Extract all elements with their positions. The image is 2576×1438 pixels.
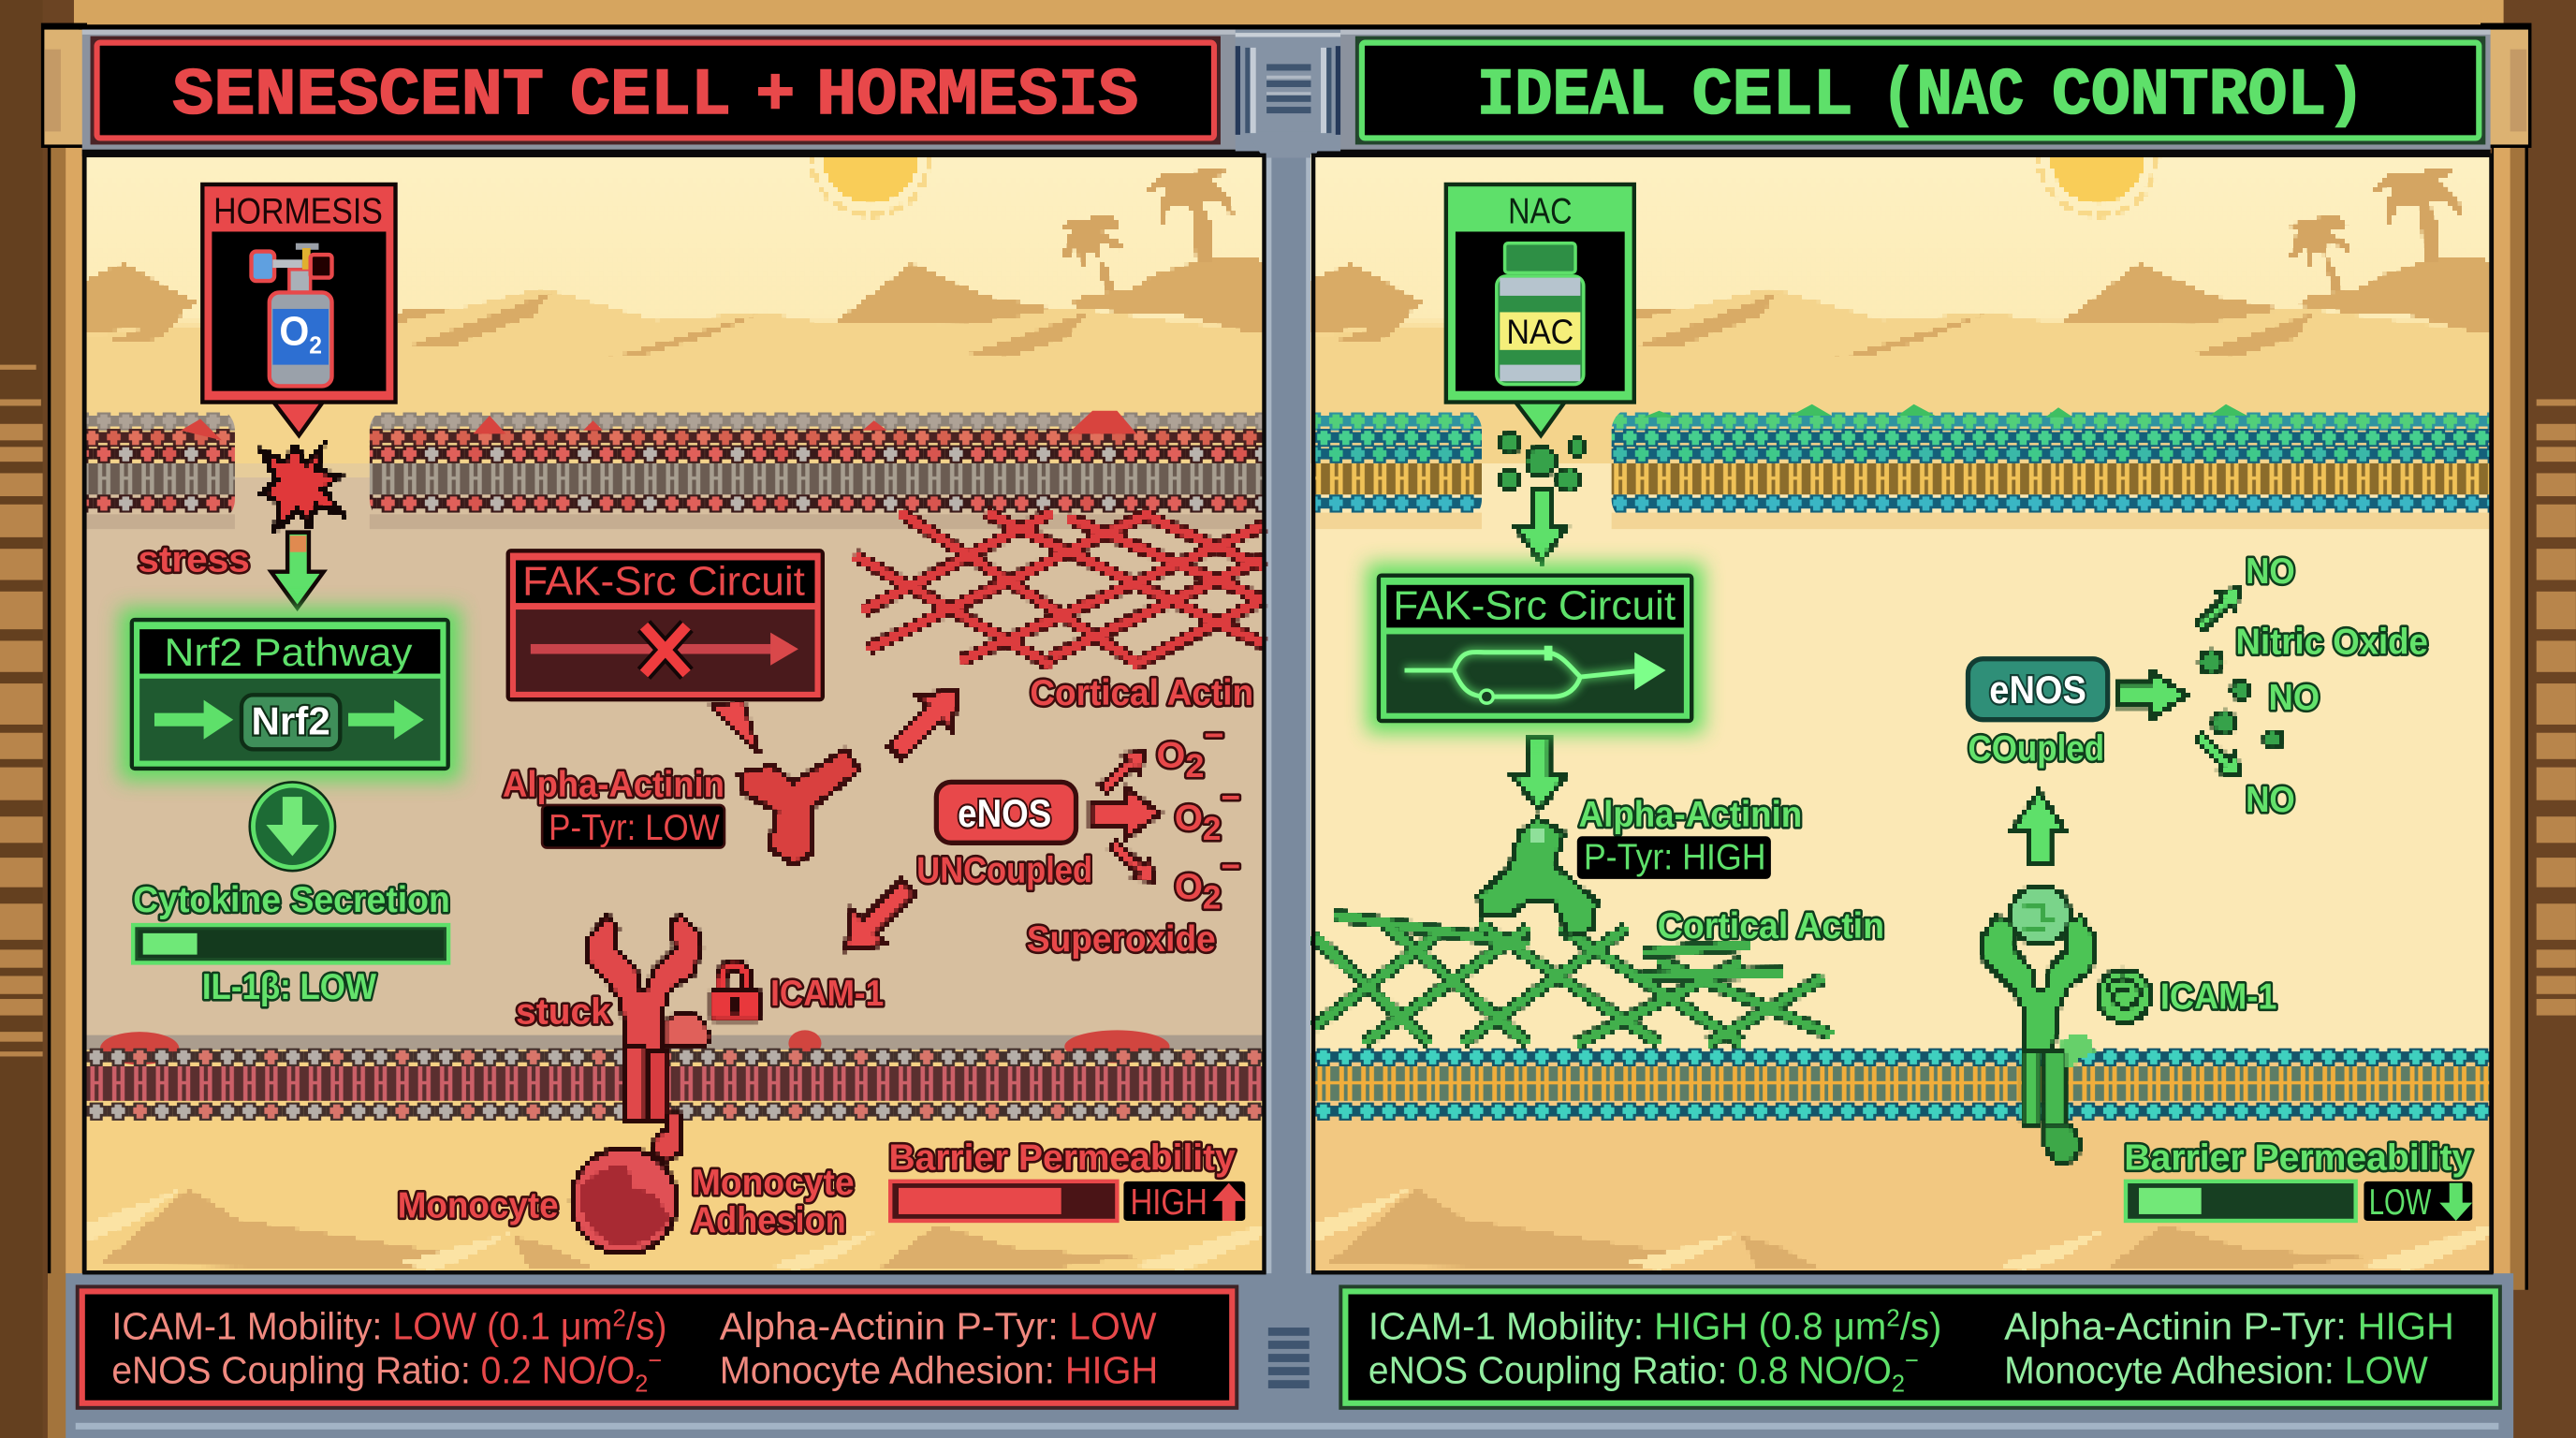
arrow: superoxide down	[1104, 834, 1164, 891]
arrow: eNOS to ICAM	[828, 870, 926, 967]
badge: high: HIGH	[1130, 1182, 1208, 1223]
stats panel: senescent	[76, 1284, 1238, 1410]
callout: hormesis oxygen	[200, 183, 398, 435]
lower vent	[1268, 1328, 1310, 1388]
arrow: eNOS to superoxide	[1090, 788, 1160, 838]
arrow: NO up	[2190, 580, 2248, 637]
panel: FAK-Src circuit broken	[506, 549, 825, 701]
stats panel: ideal: ICAM-1 Mobility: HIGH (0.8 μm	[1368, 1304, 1888, 1347]
label: NO middle: NO	[2269, 678, 2320, 718]
arrow: coupled signal up	[2012, 792, 2065, 864]
stats panel: senescent: 2	[612, 1303, 626, 1331]
superoxide O2- bottom: 2	[1203, 880, 1221, 917]
label: cortical actin: Cortical Actin	[1658, 906, 1884, 946]
panel outlines	[84, 155, 2491, 1272]
label: monocyte adhesion: Adhesion	[692, 1200, 846, 1240]
label: alpha-actinin: Alpha-Actinin	[1579, 795, 1802, 835]
bar: cytokine level	[133, 925, 448, 962]
upper membrane: ideal	[1281, 404, 2539, 529]
icon: padlock	[711, 965, 759, 1020]
ICAM-1 receptor, stuck	[587, 916, 711, 1162]
arrow: FAK-Src to alpha-actinin	[1513, 738, 1566, 810]
arrow: NAC to FAK-Src	[1515, 490, 1567, 562]
stress arrow	[271, 533, 324, 608]
superoxide O2- bottom: O	[1175, 867, 1203, 907]
upper vent	[1266, 64, 1310, 113]
lower membrane: senescent	[85, 1030, 1264, 1121]
icon: cytokine secretion down	[250, 782, 335, 871]
eNOS uncoupled pill	[936, 782, 1076, 843]
monocyte cell	[572, 1149, 677, 1254]
icon: NAC bottle	[1497, 243, 1584, 385]
title bar: senescent cell	[91, 37, 1221, 144]
label: nitric oxide: Nitric Oxide	[2236, 622, 2428, 662]
label: cortical actin: Cortical Actin	[1030, 673, 1253, 713]
ideal membranes	[1281, 404, 2539, 1121]
eNOS uncoupled pill: eNOS	[958, 791, 1051, 835]
icon: mobility spiral	[2098, 969, 2150, 1022]
label: ICAM-1: ICAM-1	[2160, 977, 2276, 1018]
label: NO top: NO	[2246, 551, 2295, 592]
label: barrier permeability: Barrier Permeability	[2124, 1138, 2473, 1179]
nitric oxide particles	[2200, 651, 2283, 748]
icon: NAC bottle: NAC	[1506, 313, 1573, 351]
superoxide O2- middle: 2	[1203, 811, 1221, 847]
title bar: ideal cell: IDEAL	[1477, 60, 1666, 134]
icon: oxygen tank	[252, 243, 332, 386]
panel: Nrf2 pathway: Nrf2	[252, 698, 330, 742]
eNOS coupled pill	[1968, 659, 2108, 720]
callout: NAC	[1444, 183, 1636, 435]
senescent membranes	[50, 411, 1308, 1121]
callout: NAC: NAC	[1508, 192, 1573, 232]
label: stress: stress	[138, 540, 250, 580]
icon: stress burst	[263, 447, 342, 529]
superoxide O2- top: −	[1204, 717, 1223, 754]
alpha-actinin protein	[1479, 818, 1597, 936]
label: uncoupled: UNCoupled	[916, 850, 1092, 890]
superoxide O2- middle: −	[1221, 779, 1240, 815]
stats panel: senescent: Monocyte Adhesion: HIGH	[720, 1349, 1158, 1392]
label: NO bottom: NO	[2246, 780, 2295, 820]
panel: FAK-Src circuit active: FAK-Src Circuit	[1393, 583, 1676, 629]
title bar: ideal cell: (NAC	[1881, 60, 2024, 134]
label: barrier permeability: Barrier Permeability	[888, 1138, 1236, 1179]
ICAM-1 receptor, mobile	[1983, 886, 2096, 1164]
label: IL-1 beta: IL-1β: LOW	[202, 967, 376, 1007]
label: ICAM-1: ICAM-1	[770, 974, 884, 1014]
upper membrane: senescent	[50, 411, 1308, 529]
panel: senescent cell artwork	[263, 447, 1264, 1254]
arrow: NO down	[2190, 727, 2248, 785]
badge: low: LOW	[2369, 1182, 2432, 1223]
cortical actin network	[855, 513, 1264, 666]
superoxide O2- top: 2	[1185, 748, 1204, 785]
cortical actin network	[1314, 916, 1832, 1043]
icon: oxygen tank: 2	[309, 330, 322, 359]
title bar: ideal cell: CELL	[1692, 60, 1853, 134]
label: alpha-actinin: Alpha-Actinin	[503, 765, 724, 805]
stats panel: ideal	[1339, 1284, 2502, 1410]
panel: Nrf2 pathway	[120, 608, 460, 781]
arrow: eNOS to NO	[2117, 672, 2187, 718]
panel: ideal cell artwork	[1314, 433, 2283, 1164]
label: coupled: COupled	[1968, 729, 2104, 770]
title bar: ideal cell	[1355, 37, 2485, 144]
superoxide O2- bottom: −	[1221, 848, 1240, 885]
superoxide O2- top: O	[1157, 736, 1185, 776]
icon: oxygen tank: O	[279, 309, 311, 355]
panel: senescent desert background	[85, 97, 1264, 1273]
alpha-actinin protein	[739, 749, 859, 864]
lower membrane: ideal	[1312, 1049, 2491, 1121]
bar: barrier permeability low	[2126, 1181, 2356, 1221]
NAC particles	[1500, 433, 1586, 492]
stats panel: ideal: eNOS Coupling Ratio: 0.8 NO/O	[1368, 1349, 1897, 1392]
panel: FAK-Src circuit active	[1367, 564, 1704, 733]
panel: ideal desert background	[1312, 97, 2491, 1273]
badge: P-Tyr low: P-Tyr: LOW	[549, 808, 720, 848]
stats panel: senescent: ICAM-1 Mobility: LOW (0.1 μm	[111, 1304, 618, 1347]
title bar: senescent cell: CELL	[570, 60, 731, 134]
label: stuck: stuck	[516, 991, 611, 1032]
stats panel: ideal: Alpha-Actinin P-Tyr: HIGH	[2004, 1304, 2454, 1347]
badge: P-Tyr high: P-Tyr: HIGH	[1584, 837, 1766, 877]
title bar: senescent cell: SENESCENT	[172, 60, 544, 134]
spike from FAK box to alpha-actinin	[711, 700, 759, 753]
title bar: senescent cell: +	[755, 60, 795, 134]
stats panel: senescent: eNOS Coupling Ratio: 0.2 NO/O	[111, 1349, 640, 1392]
label: superoxide: Superoxide	[1027, 919, 1216, 960]
bar: barrier permeability high	[890, 1181, 1117, 1221]
centre column: steel divider	[1236, 30, 1340, 1282]
callout: hormesis oxygen: HORMESIS	[213, 192, 383, 232]
stats panel: ideal: /s)	[1900, 1304, 1941, 1347]
superoxide O2- middle: O	[1175, 798, 1203, 838]
stats panel: senescent: /s)	[626, 1304, 667, 1347]
stats panel: senescent: 2	[635, 1369, 648, 1397]
label: monocyte adhesion: Monocyte	[692, 1163, 855, 1203]
stats panel: ideal: 2	[1892, 1369, 1905, 1397]
panel: FAK-Src circuit broken: FAK-Src Circuit	[522, 558, 805, 604]
stats panel: senescent: Alpha-Actinin P-Tyr: LOW	[720, 1304, 1157, 1347]
eNOS coupled pill: eNOS	[1989, 668, 2086, 712]
stats panel: ideal: −	[1905, 1346, 1919, 1374]
label: cytokine secretion: Cytokine Secretion	[133, 880, 450, 920]
arrow: actin to cortical	[878, 672, 975, 770]
stats panel: senescent: −	[648, 1346, 662, 1374]
stats panel: ideal: 2	[1886, 1303, 1900, 1331]
title bar: ideal cell: CONTROL)	[2052, 60, 2365, 134]
label: monocyte: Monocyte	[398, 1185, 559, 1225]
stats panel: ideal: Monocyte Adhesion: LOW	[2004, 1349, 2428, 1392]
label: monocyte adhesion	[692, 1163, 855, 1240]
title bar: senescent cell: HORMESIS	[816, 60, 1138, 134]
arrow: superoxide up	[1094, 742, 1153, 799]
panel: Nrf2 pathway: Nrf2 Pathway	[164, 630, 413, 674]
